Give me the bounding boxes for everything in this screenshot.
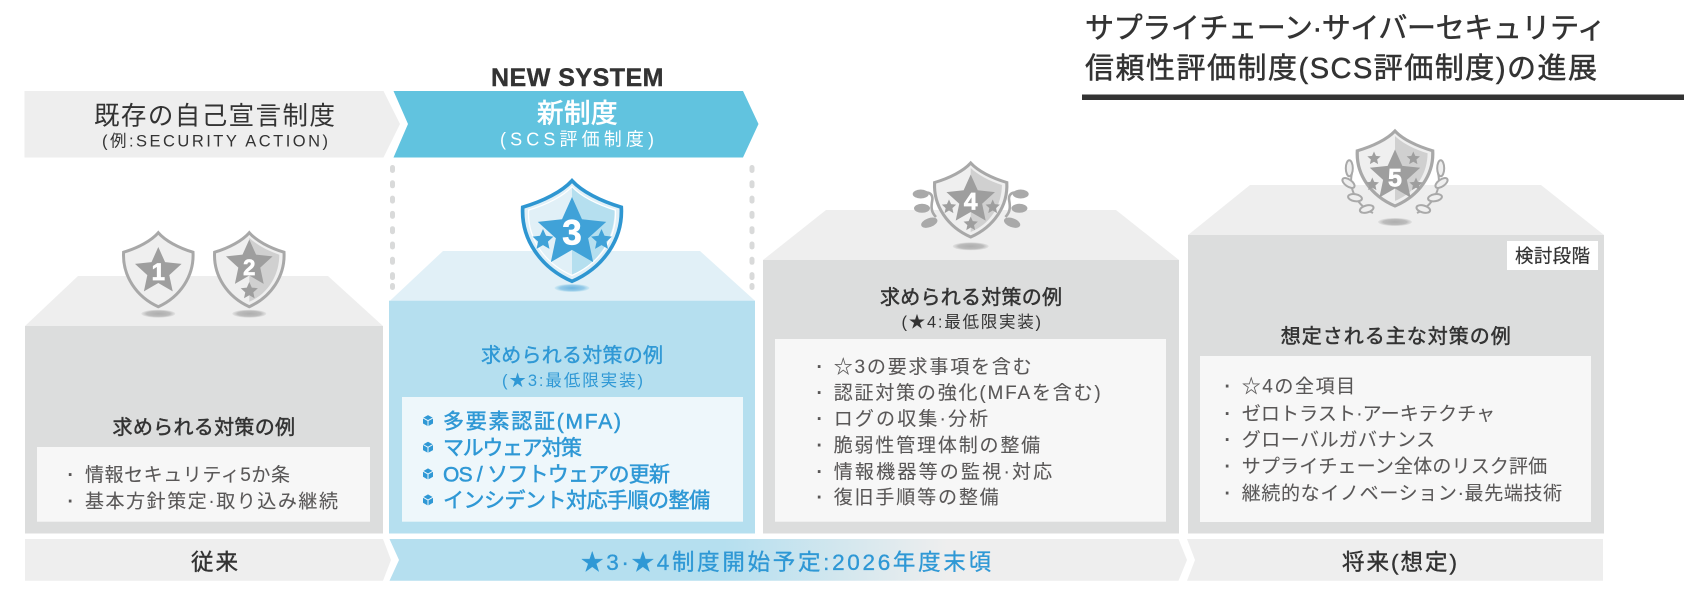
list: level 1-2: · bbox=[68, 491, 74, 512]
list: level 5: · bbox=[1224, 484, 1231, 504]
list: level 4: · bbox=[816, 383, 823, 404]
heading: level 3: 求められる対策の例 bbox=[481, 344, 663, 367]
timeline: past: 従来 bbox=[191, 550, 238, 575]
icon: badge level 5 bbox=[1341, 131, 1449, 226]
list: level 4: 認証対策の強化(MFAを含む) bbox=[834, 382, 1101, 404]
list: level 1-2: · bbox=[68, 465, 74, 486]
header arrow: existing self-declaration bbox=[24, 91, 400, 158]
list: level 5: · bbox=[1224, 376, 1231, 398]
list: level 1-2: 情報セキュリティ5か条 bbox=[85, 464, 290, 486]
header arrow: existing self-declaration: 既存の自己宣言制度 bbox=[94, 102, 335, 130]
list: level 4: ☆3の要求事項を含む bbox=[834, 356, 1032, 378]
header arrow: new system: 新制度 bbox=[537, 98, 618, 128]
timeline: scheme start: ★3·★4制度開始予定:2026年度末頃 bbox=[581, 550, 991, 575]
title: サプライチェーン·サイバーセキュリティ bbox=[1085, 13, 1606, 45]
list: level 5: ゼロトラスト·アーキテクチャ bbox=[1242, 403, 1495, 425]
timeline: future: 将来(想定) bbox=[1342, 550, 1457, 575]
tag: under consideration: 検討段階 bbox=[1515, 246, 1590, 266]
list: level 3: マルウェア対策 bbox=[443, 437, 582, 460]
timeline: past bbox=[25, 539, 391, 581]
list: level 5: · bbox=[1224, 430, 1231, 451]
timeline: scheme start bbox=[390, 539, 1187, 581]
timeline: future bbox=[1187, 539, 1603, 581]
subheading: level 3: (★3:最低限実装) bbox=[502, 371, 643, 390]
list: level 1-2: 基本方針策定·取り込み継続 bbox=[85, 490, 338, 512]
title: 信頼性評価制度(SCS評価制度)の進展 bbox=[1085, 52, 1597, 85]
NEW SYSTEM label: NEW SYSTEM bbox=[491, 64, 664, 92]
header arrow: existing self-declaration: (例:SECURITY ACTION) bbox=[102, 132, 328, 151]
list: level 5: サプライチェーン全体のリスク評価 bbox=[1242, 456, 1547, 478]
list: level 5: ☆4の全項目 bbox=[1242, 376, 1355, 398]
heading: level 4: 求められる対策の例 bbox=[880, 286, 1062, 309]
panel: levels 1 and 2 bbox=[25, 233, 383, 534]
heading: level 5: 想定される主な対策の例 bbox=[1281, 325, 1511, 348]
icon: badge level 3: 3 bbox=[562, 214, 582, 252]
list: level 4: ログの収集·分析 bbox=[834, 408, 988, 430]
header arrow: new system bbox=[394, 91, 758, 158]
tag: under consideration bbox=[1507, 241, 1598, 270]
panel: level 5 bbox=[1188, 131, 1604, 534]
list: level 4: 復旧手順等の整備 bbox=[834, 487, 999, 509]
list: level 4: · bbox=[816, 488, 823, 509]
heading: level 1-2: 求められる対策の例 bbox=[112, 416, 295, 439]
icon: badge level 4: 4 bbox=[964, 188, 978, 215]
list: level 3: インシデント対応手順の整備 bbox=[443, 490, 710, 513]
list: level 5: グローバルガバナンス bbox=[1242, 429, 1435, 451]
icon: badge level 2: 2 bbox=[243, 255, 255, 280]
list: level 5 bbox=[1200, 356, 1591, 522]
icon: badge level 1: 1 bbox=[152, 259, 165, 286]
list: level 4: 情報機器等の監視·対応 bbox=[834, 461, 1052, 483]
subheading: level 4: (★4:最低限実装) bbox=[902, 313, 1041, 332]
title bbox=[1082, 13, 1684, 100]
list: level 4: · bbox=[816, 462, 823, 483]
list: level 3: OS / ソフトウェアの更新 bbox=[443, 464, 670, 487]
list: level 4: · bbox=[816, 436, 823, 457]
panel: level 4 bbox=[763, 163, 1179, 534]
header arrow: new system: (SCS評価制度) bbox=[500, 130, 654, 150]
list: level 4: · bbox=[816, 357, 823, 378]
list: level 5: 継続的なイノベーション·最先端技術 bbox=[1242, 482, 1562, 504]
icon: badge level 5: 5 bbox=[1388, 165, 1402, 193]
icon: badge level 2 bbox=[215, 233, 284, 318]
list: level 5: · bbox=[1224, 456, 1231, 478]
list: level 3 bbox=[402, 397, 743, 522]
list: level 4: 脆弱性管理体制の整備 bbox=[834, 435, 1040, 457]
panel: level 3 bbox=[389, 181, 755, 534]
list: level 1-2 bbox=[37, 447, 370, 522]
list: level 3: 多要素認証(MFA) bbox=[443, 410, 621, 433]
dotted divider right bbox=[750, 165, 754, 290]
icon: badge level 1 bbox=[124, 233, 193, 318]
icon: badge level 3 bbox=[523, 181, 621, 292]
dotted divider left bbox=[390, 165, 395, 290]
list: level 4 bbox=[775, 339, 1166, 522]
icon: badge level 4 bbox=[913, 163, 1029, 250]
list: level 5: · bbox=[1224, 404, 1231, 425]
list: level 4: · bbox=[816, 409, 823, 430]
